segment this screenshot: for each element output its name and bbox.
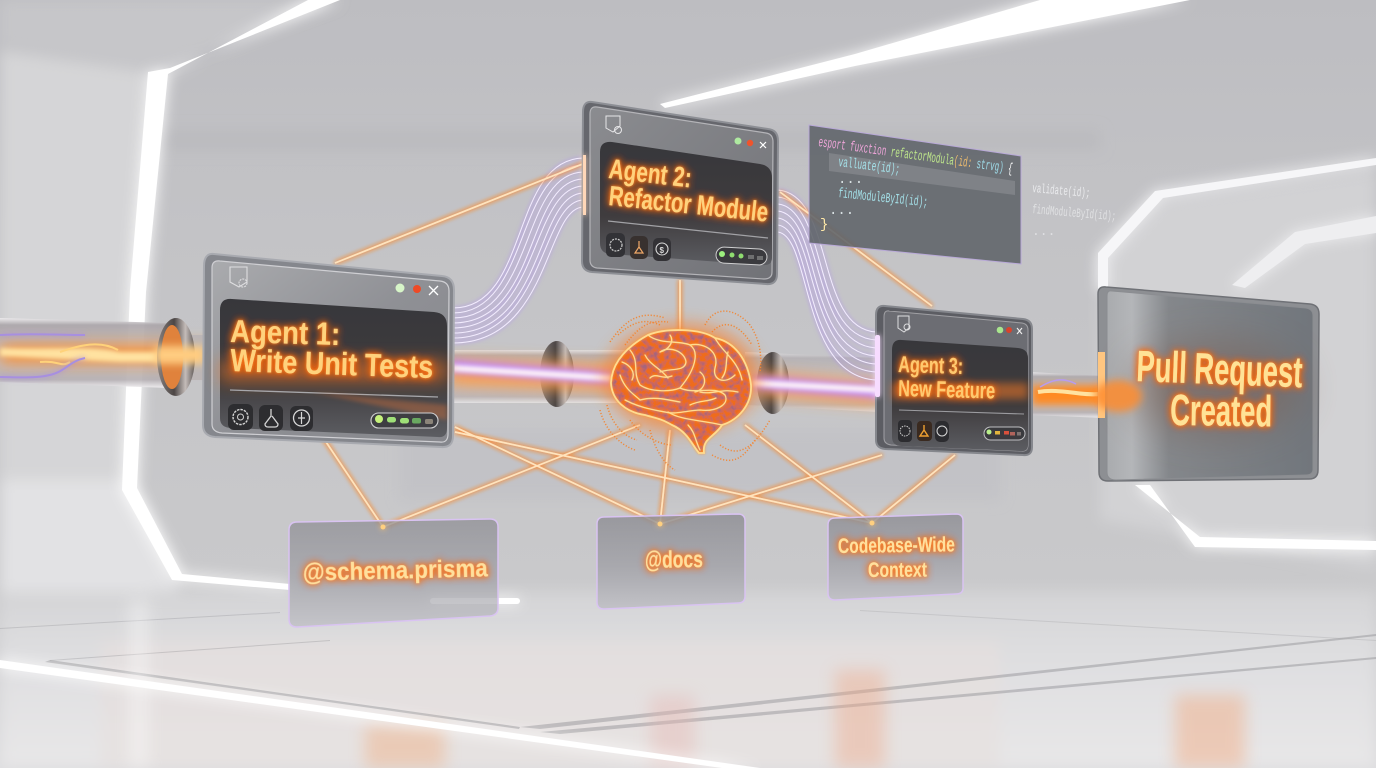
energy blob	[1094, 380, 1142, 412]
title: Write Unit Tests	[230, 342, 434, 385]
code text: ...	[838, 172, 863, 188]
floor reflections	[130, 600, 1245, 768]
icon row	[228, 404, 313, 431]
icon: agent badge	[230, 267, 247, 287]
title	[230, 313, 434, 385]
window controls	[734, 138, 766, 148]
brain	[600, 311, 770, 470]
ghost code text: findModuleById(id);	[1032, 202, 1117, 224]
purple wire bundles	[453, 158, 876, 380]
title: Agent 3:	[898, 351, 964, 379]
icon: agent badge	[606, 116, 622, 134]
title	[607, 153, 770, 228]
icon: agent badge	[898, 316, 910, 332]
window controls	[997, 327, 1022, 334]
ghost code text: validate(id);	[1032, 181, 1091, 201]
panel: agent 1	[203, 254, 454, 447]
status pill	[984, 427, 1025, 440]
title: Agent 1:	[230, 313, 341, 352]
code text: ...	[829, 203, 854, 219]
panel: agent 3	[875, 306, 1032, 455]
title: Created	[1170, 386, 1273, 436]
context card: docs	[597, 514, 745, 609]
orange burst	[312, 392, 447, 420]
context card: schema.prisma	[289, 519, 498, 627]
status pill	[716, 247, 767, 265]
icon row: $	[660, 246, 664, 255]
window controls	[396, 284, 438, 295]
context card: codebase-wide context: Context	[868, 559, 927, 582]
context card: codebase-wide context	[828, 514, 963, 600]
ghost code text	[1032, 181, 1117, 239]
title: New Feature	[898, 375, 996, 404]
status pill	[371, 413, 438, 428]
neural particle halo	[600, 311, 770, 470]
centre pipe segments	[450, 341, 880, 414]
icon row	[606, 233, 671, 261]
right output pipe into pull request card	[1030, 372, 1132, 418]
panel: pull request created	[1094, 287, 1319, 481]
title	[1136, 342, 1304, 436]
left input glass pipe with energy beam	[0, 318, 230, 396]
context card: schema.prisma: @schema.prisma	[302, 554, 489, 587]
code text: valluate(id);	[837, 155, 901, 179]
ghost code text: ...	[1032, 224, 1055, 239]
code text: }	[820, 217, 828, 233]
code text	[817, 135, 1014, 233]
title: Refactor Module	[607, 180, 770, 228]
context card: codebase-wide context: Codebase-Wide	[838, 533, 955, 558]
code text: esport fuxction refactorModula(id: strvg) {	[817, 135, 1014, 178]
code panel	[809, 125, 1021, 264]
panel: agent 2	[582, 102, 778, 284]
connection hubs on context cards	[380, 520, 874, 530]
brain folds	[611, 330, 751, 453]
code text: findModuleById(id);	[837, 186, 929, 211]
context card: docs: @docs	[645, 546, 703, 574]
icon row	[898, 420, 949, 442]
title: Agent 2:	[607, 153, 693, 194]
orange connection lines	[318, 163, 955, 527]
title	[898, 351, 996, 404]
